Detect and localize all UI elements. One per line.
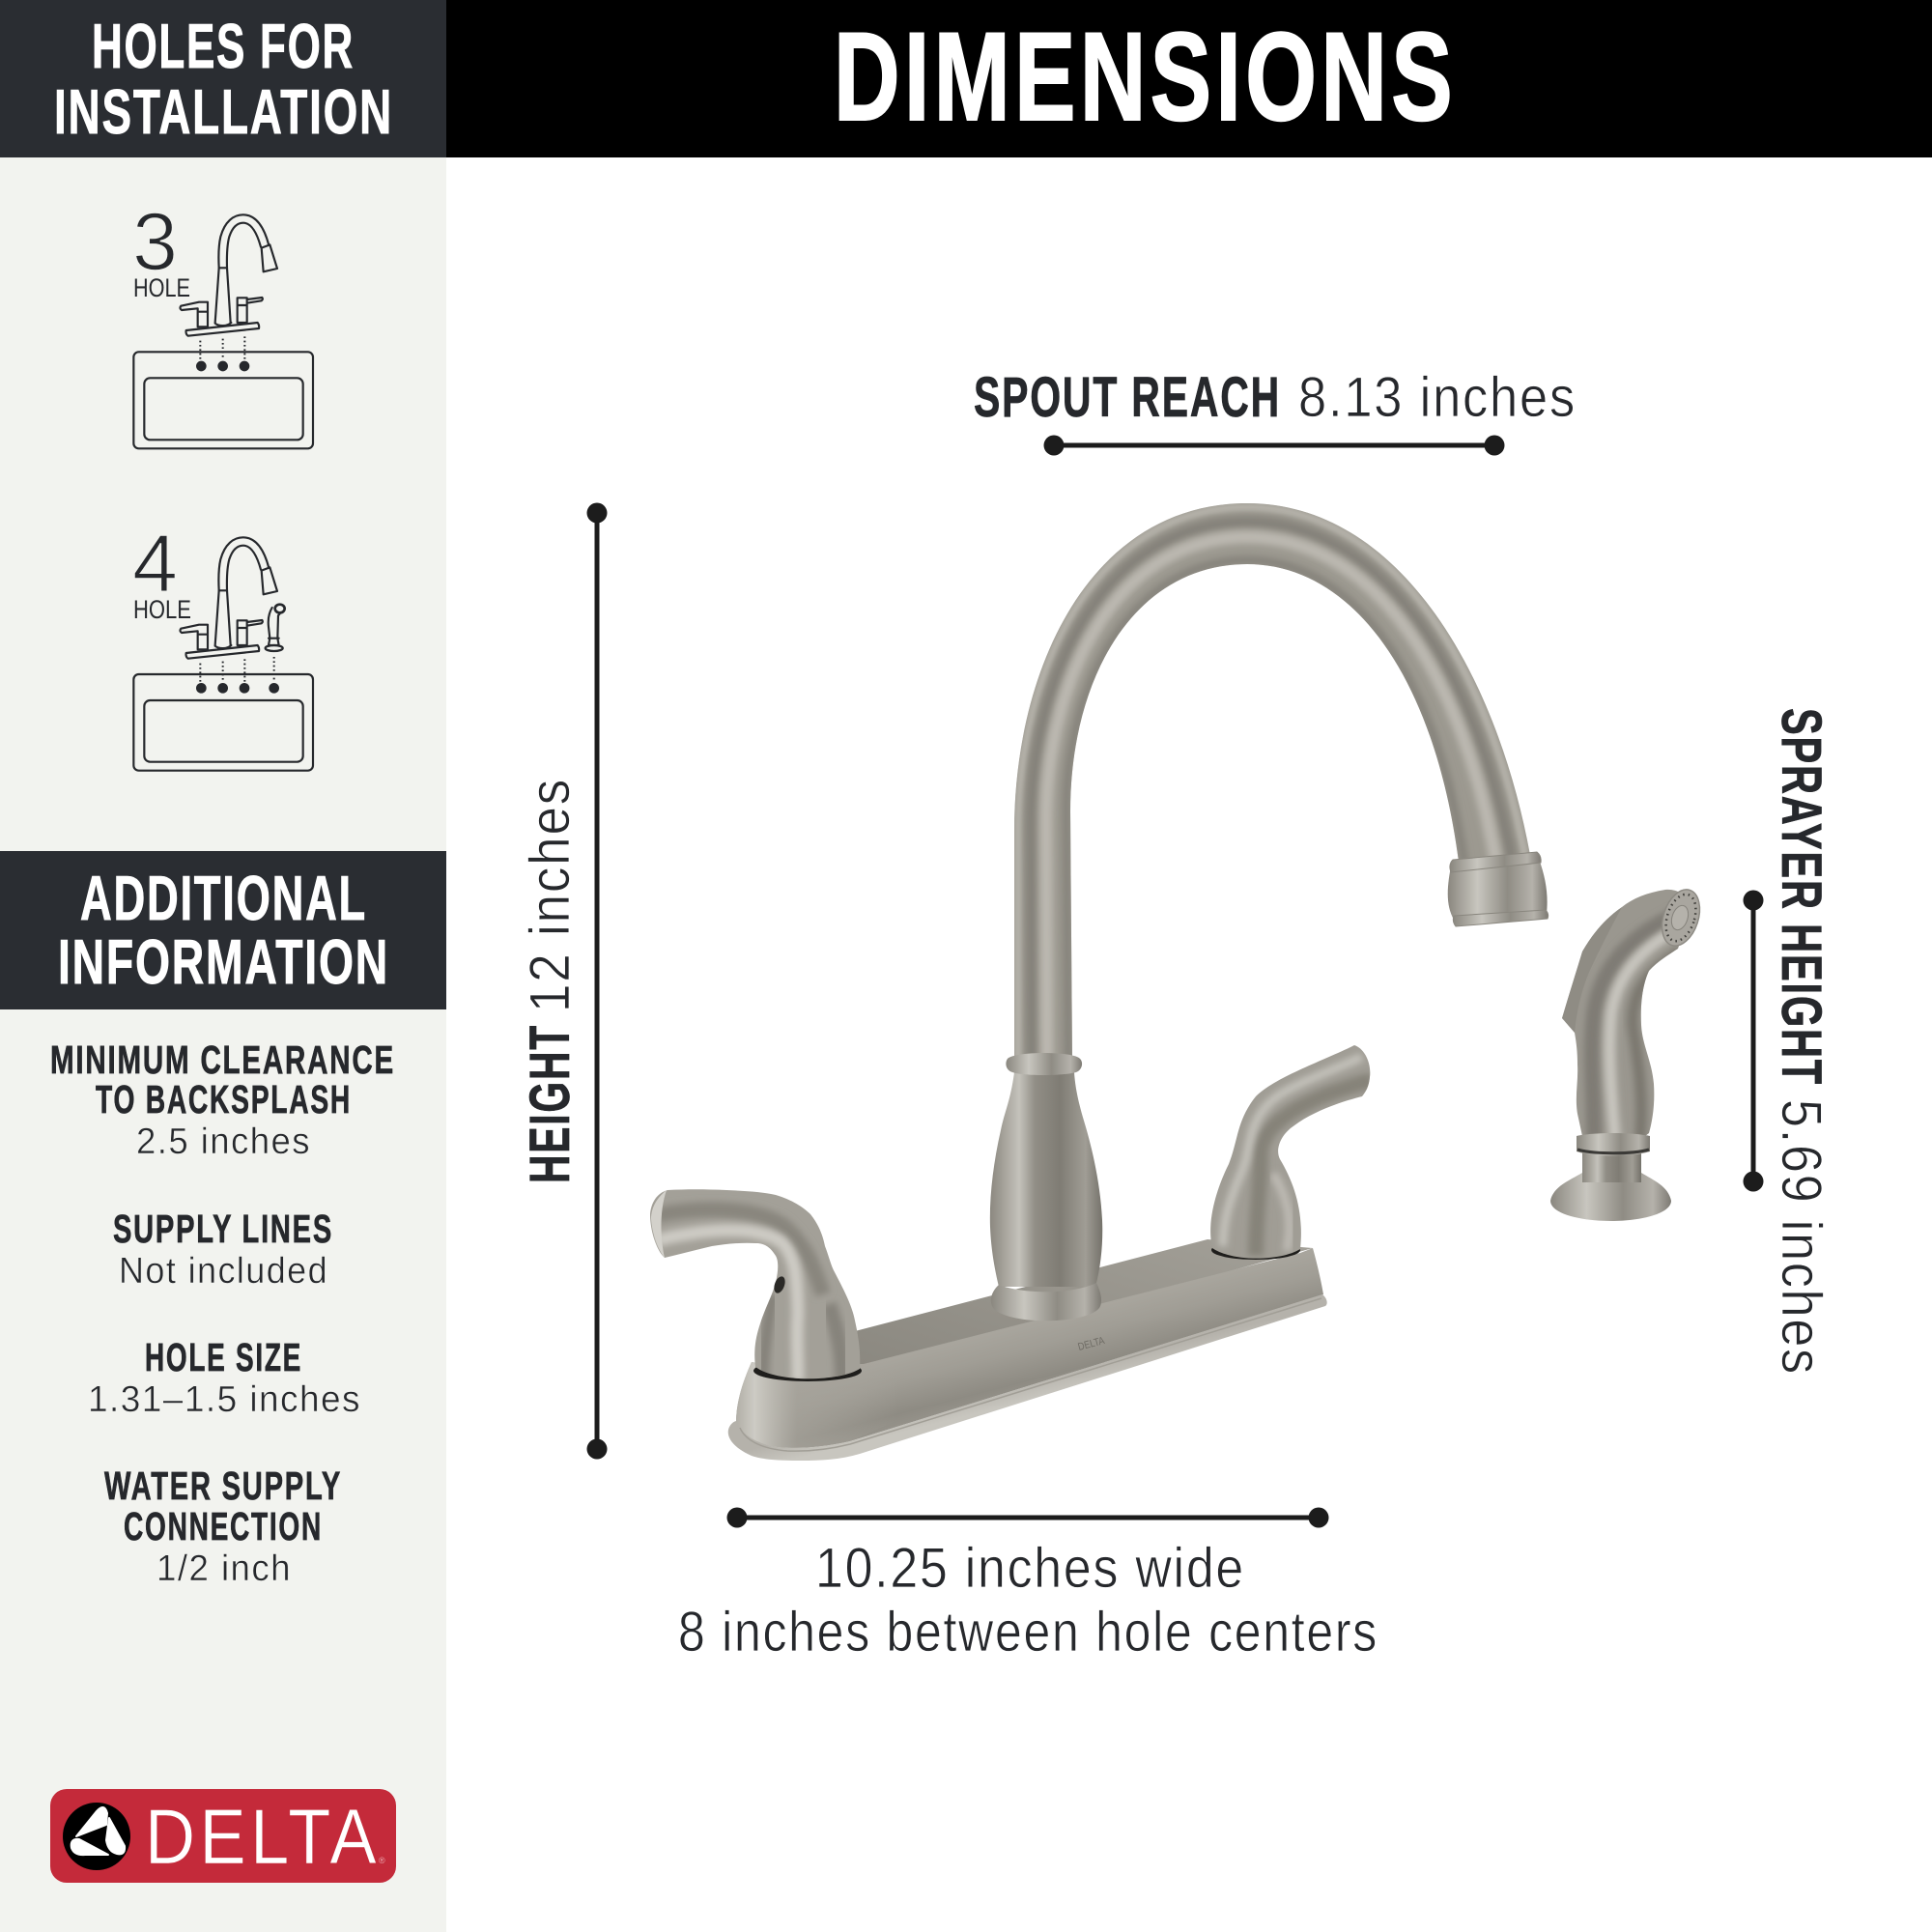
dimension: base width: 10.25 inches wide [815,1537,1245,1600]
heading: additional information: INFORMATION [58,926,389,997]
logo: delta [50,1789,396,1883]
icon: 3 hole faucet and sink: HOLE [133,273,190,302]
deck base [728,1239,1327,1461]
text block: water supply connection [104,1463,342,1589]
text block: minimum clearance: MINIMUM CLEARANCE [50,1037,395,1082]
vase body [990,1053,1102,1321]
dimension: height [519,502,607,1459]
icon: 3 hole faucet and sink [132,196,313,448]
dimension: height: 12 inches [519,778,582,1012]
icon: 4 hole faucet, sprayer and sink [132,518,313,771]
spout [1005,493,1546,1072]
text block: minimum clearance [50,1037,395,1162]
heading: additional information: ADDITIONAL [80,863,367,933]
product image: kitchen faucet [642,493,1706,1461]
dimension: spout reach: SPOUT REACH [974,366,1281,429]
left handle [650,1189,862,1381]
side sprayer [1550,884,1706,1221]
heading: additional information [0,851,446,1009]
deck base: DELTA [1077,1335,1106,1353]
heading: holes for installation: HOLES FOR [92,11,355,81]
title banner: dimensions: DIMENSIONS [834,6,1457,147]
text block: water supply connection: 1/2 inch [156,1548,292,1589]
text block: water supply connection: CONNECTION [124,1504,323,1548]
right handle [1210,1045,1370,1260]
dimension: sprayer height: SPRAYER HEIGHT [1770,708,1833,1086]
icon: 4 hole faucet, sprayer and sink: HOLE [133,595,191,624]
text block: hole size: 1.31–1.5 inches [88,1379,361,1420]
icon: 3 hole faucet and sink: 3 [132,196,178,287]
panel: left sidebar [0,0,446,1932]
dimension: base width: 8 inches between hole centers [678,1601,1378,1663]
title banner: dimensions [446,0,1932,157]
logo: delta: ® [379,1856,385,1865]
text block: minimum clearance: TO BACKSPLASH [96,1077,352,1122]
dimension: base width [678,1507,1378,1663]
text block: water supply connection: WATER SUPPLY [104,1463,342,1508]
heading: holes for installation [0,0,446,157]
text block: hole size [88,1335,361,1420]
heading: holes for installation: INSTALLATION [54,76,393,147]
dimension: sprayer height [1743,708,1833,1376]
logo: delta: DELTA [145,1794,381,1881]
icon: 4 hole faucet, sprayer and sink: 4 [132,518,178,609]
dimension: sprayer height: 5.69 inches [1770,1099,1833,1376]
spout end cap [1448,852,1548,926]
dimension: height: HEIGHT [519,1024,582,1183]
text block: minimum clearance: 2.5 inches [136,1122,311,1162]
text block: supply lines: SUPPLY LINES [113,1207,333,1251]
dimension: spout reach: 8.13 inches [1298,366,1577,429]
dimension: spout reach [974,366,1577,456]
text block: supply lines [113,1207,333,1292]
text block: hole size: HOLE SIZE [145,1335,302,1379]
text block: supply lines: Not included [119,1251,328,1292]
